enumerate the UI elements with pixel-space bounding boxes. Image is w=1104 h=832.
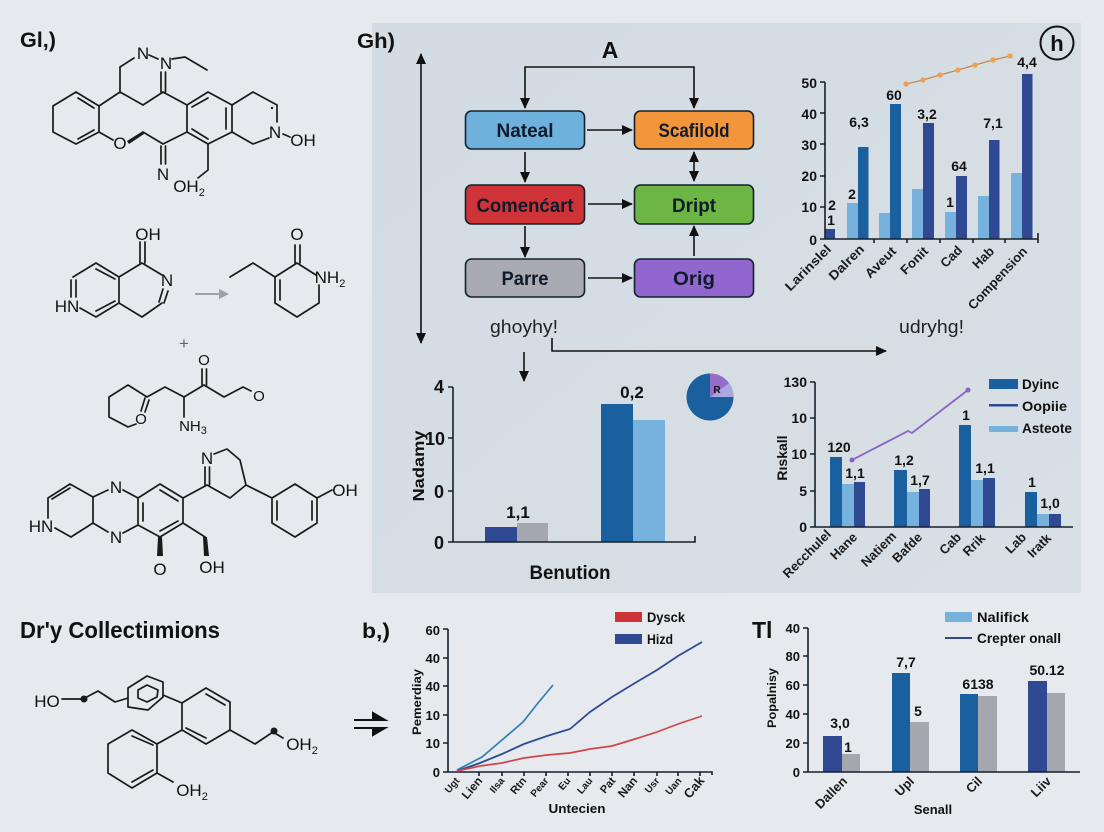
axis title: x: Untecien [548, 801, 606, 816]
axis numbers: 10 [426, 736, 440, 751]
legend: Oopiie [1022, 398, 1067, 414]
axes [803, 628, 1080, 772]
badge: h [1040, 26, 1074, 60]
axis numbers: 10 [426, 708, 440, 723]
legend: Nalifick [977, 609, 1029, 625]
chart: lower-right bars [774, 374, 1073, 581]
flow arrows [525, 67, 694, 278]
axis numbers [784, 374, 807, 535]
value labels: 1 [1028, 474, 1036, 490]
caption: udryhg: udryhg! [899, 317, 964, 337]
axis title: y: Rıskall [774, 435, 790, 481]
category labels: Rtn [508, 775, 529, 797]
axis title: x: Benution [530, 563, 610, 584]
axis numbers: 0 [799, 519, 807, 535]
molecule: product lactam [230, 225, 345, 317]
axis numbers: 40 [426, 679, 440, 694]
box: Comencart [466, 185, 584, 224]
value labels: 6138 [962, 676, 994, 692]
category labels [782, 241, 1030, 313]
series: light blue [457, 685, 553, 770]
chart: bottom-right bars [765, 609, 1080, 817]
legend: Dysck [647, 609, 685, 625]
legend: Asteote [1022, 420, 1072, 436]
molecule: product lactam: 2 [339, 278, 345, 290]
category labels: Nan [615, 774, 640, 800]
category labels: Aveut [862, 243, 900, 281]
axis numbers: 0 [433, 765, 440, 780]
axis numbers: 5 [799, 483, 807, 499]
trend line: purple [850, 388, 970, 462]
trend line: orange [903, 53, 1013, 87]
category labels: Lien [459, 774, 485, 802]
axis numbers: 10 [425, 429, 445, 449]
value labels [827, 54, 1037, 228]
axis numbers: 80 [786, 649, 800, 664]
box: Dript: Dript [672, 196, 717, 217]
value labels: 2 [828, 197, 836, 213]
arrow: reaction [195, 289, 229, 299]
axes [820, 82, 1038, 243]
axis numbers: 0 [809, 232, 817, 248]
heading: flow diagram: A [602, 37, 618, 63]
value labels: 1,1 [975, 460, 995, 476]
molecule: large fused scaffold: N [269, 123, 281, 142]
molecule: bicyclic reactant: N [161, 271, 173, 290]
molecule: biaryl diol: OH [286, 735, 312, 754]
plus sign: + [179, 334, 189, 353]
value labels: 1,7 [910, 472, 930, 488]
legend: Dyinc [1022, 376, 1059, 392]
axis title: y: Popalnisy [765, 668, 779, 728]
box: Orig: Orig [673, 269, 715, 290]
category labels: Iratk [1024, 530, 1055, 561]
value labels: 1,2 [894, 452, 914, 468]
category labels: Hane [827, 530, 860, 563]
molecule: polycyclic compound: N [110, 478, 122, 497]
category labels [443, 773, 708, 802]
bars [825, 74, 1032, 239]
molecule: product lactam: NH [315, 268, 339, 287]
axes [443, 629, 712, 776]
value labels: 60 [886, 87, 902, 103]
category labels: Cab [936, 529, 964, 557]
molecule: pyran ketone chain: O [198, 352, 210, 369]
value labels: 3,2 [917, 106, 937, 122]
value labels: 7,1 [983, 115, 1003, 131]
category labels: Eu [557, 776, 573, 793]
value labels: 50.12 [1029, 662, 1065, 678]
box: Nateal [466, 111, 584, 149]
value labels: 6,3 [849, 114, 869, 130]
molecule: biaryl diol: OH [176, 781, 202, 800]
molecule: polycyclic compound: HN [29, 517, 53, 536]
bars [823, 673, 1065, 772]
axis numbers: 40 [801, 106, 817, 122]
bars [830, 425, 1061, 527]
value labels: 1 [946, 194, 954, 210]
axis numbers: 130 [784, 374, 807, 390]
box: Parre [466, 259, 584, 297]
legend [989, 376, 1072, 436]
flow diagram [466, 67, 754, 297]
box: Scafilold: Scafilold [658, 121, 730, 142]
value labels: 1,1 [845, 465, 865, 481]
value labels: 1 [962, 407, 970, 423]
category labels: Liiv [1028, 773, 1055, 800]
chart: top-right bars [782, 53, 1038, 313]
molecule: product lactam: O [290, 225, 304, 244]
box: Nateal: Nateal [496, 121, 554, 142]
value labels: 120 [827, 439, 851, 455]
axis numbers: 0 [434, 482, 444, 502]
legend: Crepter onall [977, 630, 1061, 646]
legend: Hizd [647, 631, 673, 647]
value labels: 5 [914, 703, 922, 719]
axis title: x: Senall [914, 802, 952, 817]
molecule: biaryl diol: 2 [202, 791, 208, 803]
axis numbers: 4 [434, 377, 444, 397]
value labels: 2 [848, 186, 856, 202]
category labels: Fonit [897, 243, 932, 277]
molecule: pyran ketone chain [109, 352, 265, 437]
value labels: 1 [844, 739, 852, 755]
axis numbers: 60 [786, 678, 800, 693]
value labels: 3,0 [830, 715, 850, 731]
axis numbers: 40 [786, 707, 800, 722]
molecule: bicyclic reactant [55, 225, 173, 317]
legend [615, 609, 685, 647]
category labels: Ugt [443, 775, 463, 796]
molecule: pyran ketone chain: O [135, 411, 147, 428]
category labels: Uan [664, 776, 684, 797]
molecule: pyran ketone chain: O [253, 388, 265, 405]
molecule: bicyclic reactant: HN [55, 297, 79, 316]
category labels: Larinslel [782, 242, 834, 294]
category labels: Cak [680, 773, 708, 801]
axis numbers [426, 623, 440, 780]
value labels [830, 654, 1065, 755]
heading: central panel: Gh) [357, 30, 395, 53]
axis numbers [786, 621, 800, 780]
axis numbers: 30 [801, 137, 817, 153]
heading: right chart: Tl [752, 617, 772, 643]
pie chart [686, 373, 734, 420]
category labels [812, 773, 1055, 812]
chart: lower-left bars [411, 377, 695, 584]
value labels: 1 [827, 212, 835, 228]
molecule: polycyclic compound: N [201, 449, 213, 468]
category labels: Recchulel [780, 527, 834, 581]
chart: line chart [410, 609, 712, 816]
axis numbers: 60 [426, 623, 440, 638]
axis numbers: 10 [791, 410, 807, 426]
value labels: 64 [951, 158, 967, 174]
value labels [827, 407, 1060, 511]
value labels: 4,4 [1017, 54, 1037, 70]
pie chart: R [713, 385, 721, 396]
molecule: large fused scaffold: OH [173, 177, 199, 196]
molecule: large fused scaffold: N [137, 44, 149, 63]
category labels: Bafde [889, 530, 925, 566]
value labels: 1,1 [506, 503, 530, 522]
molecule: large fused scaffold: N [160, 54, 172, 73]
arrow: down to lower chart [523, 352, 525, 381]
axis numbers: 50 [801, 75, 817, 91]
category labels: Ilsa [488, 776, 508, 796]
category labels: Lau [575, 776, 595, 797]
series: navy [457, 642, 702, 771]
caption: ghoyhy: ghoyhy! [490, 317, 558, 337]
heading: collections: Dr'y Collectiımions [20, 617, 220, 643]
category labels: Dalren [825, 241, 867, 283]
value labels: 7,7 [896, 654, 916, 670]
category labels: Rrik [960, 530, 989, 559]
molecule: polycyclic compound: N [110, 528, 122, 547]
legend [945, 609, 1061, 646]
axis numbers: 10 [801, 199, 817, 215]
molecule: biaryl diol: 2 [312, 745, 318, 757]
category labels: Pear [529, 776, 551, 800]
series: red [457, 716, 702, 771]
box: Scafilold [634, 111, 754, 149]
axis numbers: 40 [786, 621, 800, 636]
category labels: Natiem [858, 529, 899, 570]
arrow: equilibrium [354, 713, 385, 735]
panel: central diagram background [372, 23, 1081, 593]
axis title: y: Pemerdiay [410, 669, 424, 735]
category labels: Usr [643, 776, 662, 796]
axis numbers: 10 [791, 446, 807, 462]
axis numbers [801, 75, 817, 248]
molecule: pyran ketone chain: NH [179, 418, 201, 435]
arrow: connector to right chart [552, 338, 886, 351]
heading: left column: Gl,) [20, 29, 56, 52]
molecule: bicyclic reactant: OH [135, 225, 161, 244]
axes [448, 387, 695, 542]
molecule: polycyclic compound: OH [332, 481, 358, 500]
box: Dript [634, 185, 754, 224]
molecule: polycyclic compound: O [153, 560, 167, 579]
category labels: Hab [969, 243, 997, 271]
category labels [780, 527, 1055, 581]
molecule: biaryl diol: HO [34, 692, 60, 711]
value labels: 0,2 [620, 383, 644, 402]
value labels [506, 383, 644, 522]
molecule: biaryl diol [34, 676, 318, 803]
molecule: large fused scaffold: OH [290, 131, 316, 150]
badge: h: h [1050, 31, 1064, 56]
axis numbers: 0 [793, 765, 800, 780]
molecule: large fused scaffold: O [113, 134, 127, 153]
box: Orig [634, 259, 754, 297]
category labels: Upl [892, 774, 917, 799]
bars [485, 404, 665, 542]
heading: line chart: b,) [362, 620, 390, 643]
category labels: Cil [963, 774, 985, 796]
axis numbers: 40 [426, 651, 440, 666]
category labels: Dallen [812, 773, 850, 812]
molecule: large fused scaffold: N [157, 165, 169, 184]
axis numbers [425, 377, 445, 553]
molecule: polycyclic compound [29, 449, 358, 579]
value labels: 1,0 [1040, 495, 1060, 511]
category labels: Cad [937, 242, 965, 270]
axes [810, 382, 1073, 527]
axis numbers: 20 [786, 736, 800, 751]
category labels: Pat [598, 775, 619, 796]
box: Parre: Parre [502, 269, 548, 290]
category labels: Lab [1002, 529, 1029, 556]
axis numbers: 0 [434, 533, 444, 553]
arrow: vertical double-headed [420, 54, 422, 343]
molecule: large fused scaffold [53, 44, 316, 199]
axis numbers: 20 [801, 168, 817, 184]
box: Comencart: Comenćart [476, 196, 574, 217]
category labels: Compension [965, 244, 1030, 313]
molecule: polycyclic compound: OH [199, 558, 225, 577]
molecule: large fused scaffold: 2 [199, 187, 205, 199]
axis title: y: Nadamy [411, 430, 428, 502]
molecule: pyran ketone chain: 3 [201, 425, 207, 437]
